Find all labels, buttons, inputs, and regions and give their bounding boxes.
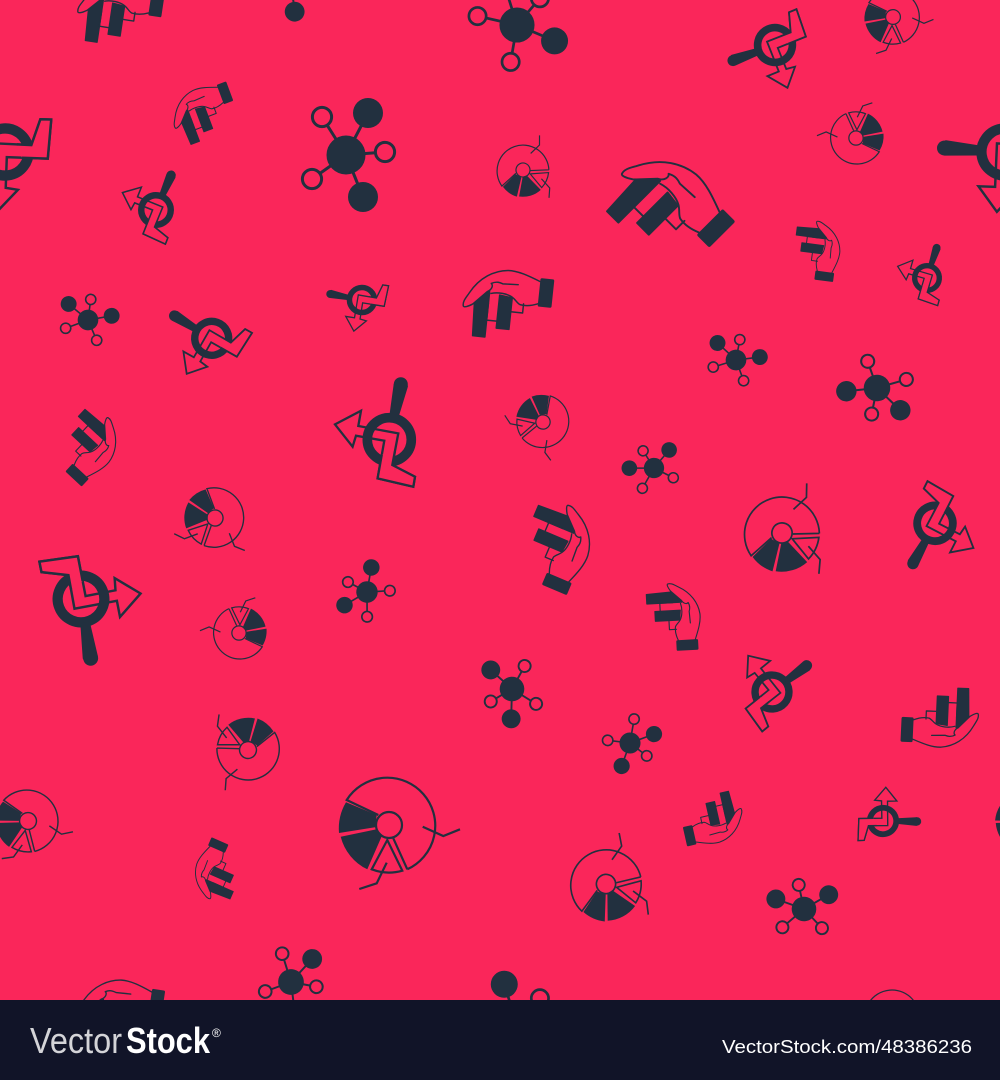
icon: network lower right bbox=[764, 874, 843, 941]
icon: pie chart large bbox=[339, 778, 460, 889]
icon: network top wrap of bottom bbox=[253, 0, 332, 27]
icon: network bottom wrap of top bbox=[453, 958, 584, 1080]
icon: hand with bars centre bbox=[460, 266, 554, 343]
icon: network mid left bbox=[328, 551, 404, 631]
icon: hand with bars lower right bbox=[678, 789, 748, 849]
icon: magnifier mid left bbox=[38, 532, 158, 671]
icon: pie chart upper centre bbox=[489, 125, 569, 208]
icon: magnifier centre left bbox=[326, 285, 389, 332]
icon: hand with bars lower left bbox=[186, 837, 250, 906]
icon: magnifier upper left bbox=[114, 162, 181, 244]
icon: magnifier right bbox=[894, 240, 945, 306]
icon: network lower bbox=[592, 704, 670, 783]
icon: pie chart top right bbox=[864, 0, 933, 53]
icon: magnifier mid right bbox=[900, 481, 988, 585]
icon: hand with bars far right bbox=[901, 686, 980, 749]
icon: magnifier bottom right bbox=[849, 782, 923, 842]
icon: hand with bars upper left bbox=[165, 79, 242, 148]
icon: pie chart left edge bbox=[0, 785, 79, 870]
icon: pie chart bottom wrap bbox=[864, 990, 933, 1053]
icon: pie chart left bbox=[165, 475, 267, 577]
icon: hand with bars top left bbox=[74, 0, 165, 51]
image id url: VectorStock.com/48386236 bbox=[722, 1037, 972, 1057]
logo wordmark bbox=[30, 1020, 221, 1061]
icon: network centre bbox=[616, 432, 691, 502]
icon: hand with bars left bbox=[45, 402, 131, 488]
icon: pie chart lower centre bbox=[565, 826, 663, 929]
icon: pie chart mid left bbox=[200, 598, 267, 659]
icon: hand with bars large bbox=[595, 137, 739, 280]
icon: network large bbox=[302, 98, 395, 212]
logo wordmark: ® bbox=[212, 1026, 221, 1040]
footer bar bbox=[0, 1000, 1000, 1080]
icon: hand with bars bottom wrap bbox=[74, 974, 165, 1051]
icon: magnifier lower right bbox=[717, 628, 819, 732]
icon: pie chart upper right bbox=[817, 103, 884, 164]
icon: magnifier left edge wrap bbox=[0, 118, 63, 219]
icon: network top bbox=[453, 0, 584, 89]
icon: pie chart centre bbox=[502, 389, 578, 469]
icon: hand with bars mid right bbox=[646, 582, 702, 652]
icon: network centre right bbox=[701, 327, 772, 390]
icon: magnifier right edge bbox=[935, 118, 1000, 219]
icon: pie chart right bbox=[733, 468, 850, 589]
icon: hand with bars centre lower bbox=[511, 494, 603, 596]
icon: pie chart lower left bbox=[190, 702, 290, 805]
icon: network lower centre bbox=[469, 645, 552, 735]
icon: magnifier large bbox=[335, 377, 415, 487]
icon: network bottom bbox=[253, 938, 332, 1027]
logo wordmark: Vector bbox=[30, 1020, 122, 1061]
icon: network right bbox=[831, 349, 922, 430]
icon: magnifier left bbox=[152, 304, 252, 390]
logo wordmark: Stock bbox=[126, 1020, 211, 1061]
icon: network left bbox=[54, 289, 123, 349]
icon: pie chart right edge wrap bbox=[989, 785, 1000, 870]
icon: magnifier top right bbox=[722, 8, 829, 108]
icon: hand with bars upper right bbox=[791, 219, 843, 282]
